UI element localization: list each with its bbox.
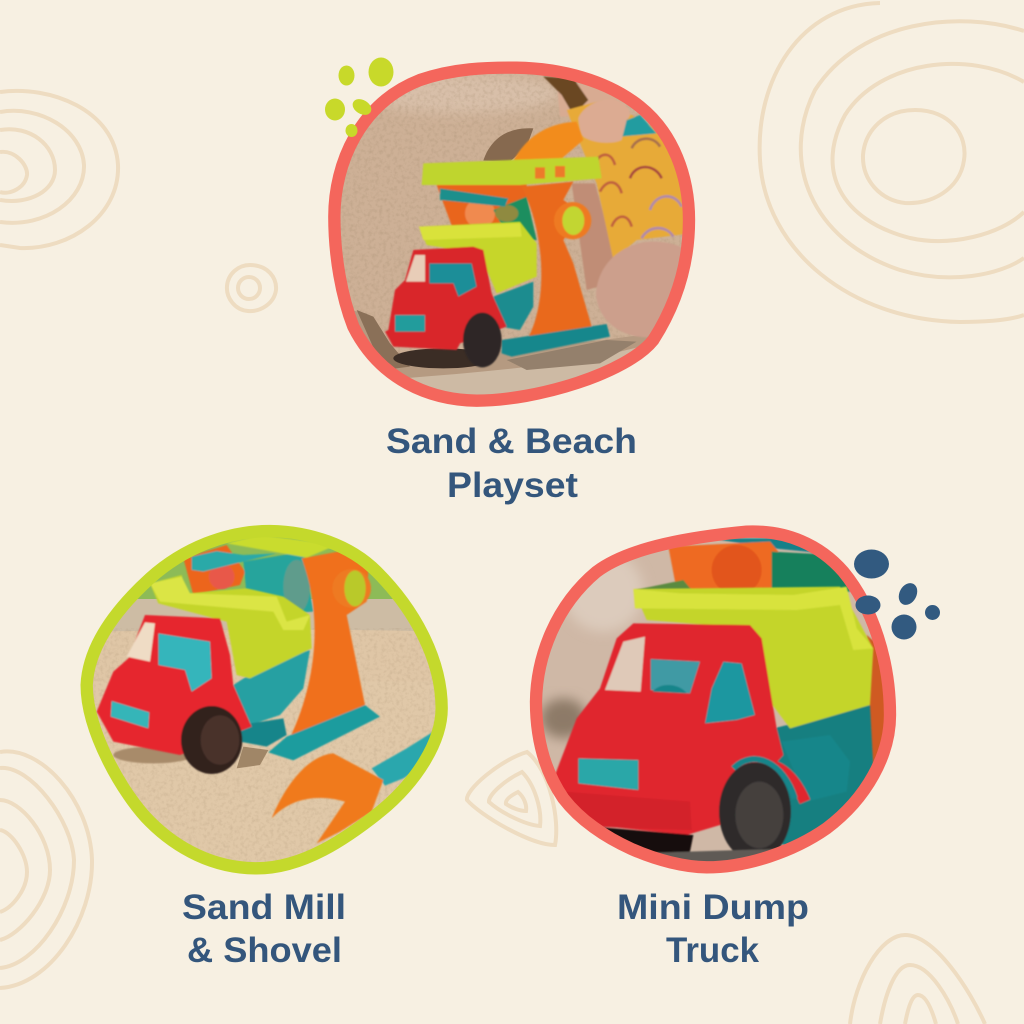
heading: sand and beach playset: Playset: [447, 466, 578, 505]
sand mill: [422, 122, 610, 357]
dump truck: [385, 222, 537, 367]
heading: mini dump truck: [617, 888, 809, 970]
icon: navy dots: [854, 550, 940, 640]
heading: sand mill and shovel: & Shovel: [187, 931, 342, 970]
sand background: [92, 537, 436, 862]
frame: lime outline: [87, 531, 442, 868]
sand mill: [183, 535, 380, 760]
heading: sand mill and shovel: Sand Mill: [182, 888, 346, 927]
frame: coral outline: [536, 532, 890, 867]
panel: mini dump truck photo: [530, 525, 896, 874]
sand background: [542, 538, 872, 852]
decorative ring: small centre: [227, 265, 276, 311]
heading: mini dump truck: Mini Dump: [617, 888, 809, 927]
sand mill behind: [637, 538, 884, 764]
decorative rings: middle triangle: [467, 752, 556, 845]
icon: lime dots: [325, 58, 394, 137]
shovel: [272, 732, 433, 843]
sand pile: [483, 128, 533, 162]
heading: sand and beach playset: [386, 422, 637, 505]
dump truck: [555, 587, 873, 882]
child: [543, 77, 692, 337]
decorative rings: bottom left: [0, 751, 92, 988]
decorative rings: bottom right: [850, 935, 985, 1024]
heading: sand and beach playset: Sand & Beach: [386, 422, 637, 461]
heading: mini dump truck: Truck: [666, 931, 760, 970]
panel: sand and beach playset photo: [328, 62, 696, 407]
dump truck: [97, 575, 312, 774]
decorative rings: top left: [0, 91, 118, 248]
sand background: [340, 74, 682, 394]
frame: coral outline: [334, 68, 689, 401]
panel: sand mill and shovel photo: [80, 524, 448, 874]
heading: sand mill and shovel: [182, 888, 346, 970]
decorative rings: top right: [760, 3, 1024, 322]
